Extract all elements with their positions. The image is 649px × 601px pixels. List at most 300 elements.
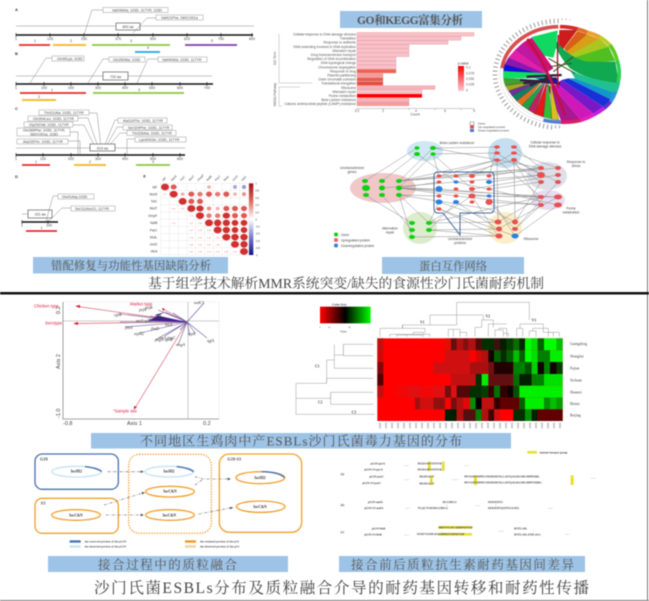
panel: gene mutation maps D: 1 (21, 224, 23, 228)
cluster backgrounds (350, 138, 567, 244)
uncharacterized proteins callout (434, 172, 494, 235)
chart: protein correlation matrix E: NalB (150, 221, 158, 225)
box: S3: S3 (41, 500, 46, 505)
chart: biplot: sopB (155, 316, 164, 321)
chart: protein correlation matrix E: 0.67 (189, 252, 193, 254)
bar chart: GO and KEGG enrichment: Response to antibiotic (324, 41, 356, 45)
chart: biplot: msgA (176, 342, 185, 347)
chart: protein correlation matrix E: MutL (150, 235, 157, 239)
plasmid legend: the reserved portion of the pG19 (85, 540, 127, 544)
plasmid legend: the deserted portion of the pG19 (85, 545, 127, 549)
panel: gene mutation maps C: 619 aa (97, 146, 108, 150)
panel: gene mutation maps B: 400 (122, 86, 128, 90)
panel: gene mutation maps C: Ala316Thr; 103D, 117YR (123, 119, 163, 123)
chart: protein correlation matrix E: 0.71 (163, 194, 167, 196)
match marks (428, 466, 572, 533)
chart: virulence gene heatmap (296, 302, 587, 428)
chart: protein correlation matrix E: MutT (188, 174, 195, 182)
match marks: : (442, 466, 443, 469)
chart: protein correlation matrix E: 0.66 (189, 244, 194, 246)
diagram: resistance gene sequence alignment: pG19-parC (369, 475, 384, 479)
bar chart: GO and KEGG enrichment: Beta-Lactam resistance (321, 98, 356, 102)
chart: protein correlation matrix E: UvrD (150, 243, 158, 247)
match marks: :: (495, 504, 497, 507)
chart: biplot: fimA (125, 325, 133, 330)
panel: gene mutation maps A: 3 (130, 39, 132, 43)
chart: protein correlation matrix E: 0.61 (172, 209, 176, 211)
chart: protein correlation matrix E: 0.51 (189, 223, 193, 225)
row labels: Shanghai (570, 355, 584, 359)
chart: biplot: pefA (138, 307, 147, 312)
chart: protein correlation matrix E: 0.6 (255, 196, 260, 200)
downregulated protein nodes (436, 180, 518, 238)
box: intermediate: IncC&N (163, 513, 176, 517)
bar chart: GO and KEGG enrichment: Drug transmembrane transport (311, 53, 356, 57)
network labels: Uncharacterized (448, 237, 472, 241)
diagram: resistance gene sequence alignment: PEVAIIVMPPLVIEDEDENLLAITQAGKGMLMPPEIRL (464, 475, 540, 479)
color key: Value (340, 330, 347, 334)
diagram: resistance gene sequence alignment: MRTSVLPCARRPAFTAF (438, 525, 473, 529)
chart: protein correlation matrix E: NalB (205, 175, 213, 182)
box: G19: IncHI2 (71, 470, 82, 474)
heading: GO and KEGG enrichment: GO和KEGG富集分析 (357, 13, 464, 27)
title: lower section: 沙门氏菌ESBLs分布及质粒融合介导的耐药基因转移和耐药性传播 (94, 578, 589, 597)
panel: gene mutation maps B: 700 (204, 86, 210, 90)
diagram: resistance gene sequence alignment: AEKKDTQATEGAAEL (488, 506, 519, 510)
diagram: resistance gene sequence alignment (341, 450, 596, 537)
color key: Color Key (332, 302, 347, 306)
row labels: Beijing (570, 414, 581, 418)
panel: gene mutation maps A: 4 (147, 46, 149, 50)
box: S3: IncC&N (69, 513, 83, 517)
bar chart: GO and KEGG enrichment: Ribosome (341, 86, 356, 90)
bar chart: GO and KEGG enrichment: DNA topological change (321, 61, 356, 65)
plasmid legend: the retained portion of the pS3 (200, 540, 239, 544)
cluster labels: C2 (318, 401, 323, 405)
heatmap cells (377, 338, 563, 421)
panel: gene mutation maps C: 1 (15, 157, 17, 161)
column labels (380, 423, 560, 428)
chart: biplot: sopE (188, 331, 197, 336)
row labels: Shaanxi (570, 390, 582, 394)
diagram: resistance gene sequence alignment: (a) (341, 472, 344, 476)
row labels: Guangdong (570, 342, 587, 346)
chart: protein correlation matrix E: -1 (255, 253, 258, 257)
chart: protein correlation matrix E: E (143, 174, 146, 178)
match marks: :: (446, 504, 448, 507)
heading: virulence gene distribution: 不同地区生鸡肉中产ESBLs沙门氏菌毒力基因的分布 (140, 434, 462, 448)
network labels: DNA damage stimulus (529, 144, 562, 148)
bar chart: GO and KEGG enrichment: 2 (382, 109, 384, 113)
panel: gene mutation maps D: 100 (46, 224, 52, 228)
network labels: Purine (566, 206, 576, 210)
panel: gene mutation maps A: 1 (15, 37, 17, 41)
panel: gene mutation maps C: Thr326Ala; 103D, 117YR (132, 132, 172, 136)
chart: protein correlation matrix E: ParC (214, 174, 222, 182)
diagram: resistance gene sequence alignment: HGDSACY (419, 475, 435, 479)
heading: protein interaction network: 蛋白互作网络 (419, 260, 487, 273)
chart: protein correlation matrix E: 0.65 (198, 244, 203, 246)
panel: gene mutation maps B: 2 (38, 95, 40, 99)
color key: 0 (319, 326, 321, 329)
chart: protein correlation matrix E: 0.58 (198, 230, 203, 232)
network labels: Response to (567, 160, 585, 164)
panel: gene mutation maps D: 151 aa (34, 212, 46, 216)
panel: gene mutation maps B: 720 aa (110, 75, 121, 79)
chart: protein correlation matrix E: MF (153, 185, 157, 189)
chart: protein correlation matrix E: ParC (150, 228, 158, 232)
diagram: resistance gene sequence alignment: IFITLAILANILALL (514, 532, 541, 536)
network labels: metabolism (563, 210, 580, 214)
diagram: resistance gene sequence alignment: HGDSAVYDTIVR (418, 461, 443, 465)
panel: gene mutation maps C: 500 (150, 157, 156, 161)
plasmid legend (70, 540, 240, 549)
chart: protein correlation matrix E: 0.82 (198, 237, 202, 239)
title: upper section: 基于组学技术解析MMR系统突变/缺失的食源性沙门氏菌耐药机制 (148, 275, 544, 291)
transfer arrows (104, 472, 232, 515)
panel: gene mutation maps C: Gln289Phe; 103D, 117YR, (23, 128, 65, 132)
chart: protein correlation matrix E: 0.81 (207, 244, 211, 246)
panel: gene mutation maps A (15, 7, 255, 52)
diagram: resistance gene sequence alignment: HGDSAVYDTIVR (418, 467, 443, 471)
dendrograms (380, 302, 559, 337)
chart: protein correlation matrix E: 0.85 (207, 230, 212, 232)
network legend: Downregulated protein (341, 244, 374, 248)
panel: gene mutation maps A: 500 (150, 37, 156, 41)
diagram: resistance gene sequence alignment: ATAFVIAMLRAARPKETAPAFTAF (417, 532, 465, 536)
section divider (0, 292, 649, 294)
match marks: : (430, 479, 431, 482)
chart: chord diagram (495, 20, 630, 132)
chart: protein correlation matrix E: 0.88 (224, 252, 229, 254)
box: G19-S3: IncHI2 (254, 476, 266, 480)
panel: gene mutation maps B: 100 (41, 86, 47, 90)
panel: gene mutation maps A: 2 (70, 39, 72, 43)
diagram: resistance gene sequence alignment: pG19-floR (372, 527, 386, 531)
box: G19-S3: G19-S3 (227, 456, 242, 461)
chart: biplot: cglB (114, 312, 122, 317)
chart: protein correlation matrix E: -0.2 (255, 225, 260, 229)
chart: protein correlation matrix E: HtrA (240, 175, 247, 182)
bar chart: GO and KEGG enrichment: Purine metabolism (329, 94, 356, 98)
panel: gene mutation maps A: 625 (184, 37, 190, 41)
panel: gene mutation maps B: 200 (68, 86, 74, 90)
panel: gene mutation maps B (15, 51, 213, 100)
panel: gene mutation maps C: 300 (95, 157, 101, 161)
panel: gene mutation maps C: 2 (89, 160, 91, 164)
chart: protein correlation matrix E: -0.4 (255, 232, 260, 236)
box: G19-S3 (219, 454, 302, 532)
chart: protein correlation matrix E: 0.81 (216, 237, 220, 239)
chart: biplot: sgfA (207, 338, 215, 343)
panel: gene mutation maps A: 1 (34, 39, 36, 43)
legend: chord diagram: Gene (478, 122, 486, 126)
panel: gene mutation maps D: D (15, 174, 18, 179)
panel: gene mutation maps D: 1 (40, 226, 42, 230)
row labels: Sichuan (570, 378, 582, 382)
chart: protein correlation matrix E: UvrD (231, 174, 239, 182)
red factor labels: Market type (130, 302, 153, 306)
chart: protein correlation matrix E: OmpF (196, 173, 205, 182)
panel: gene mutation maps B: 3 (138, 88, 140, 92)
bar chart: GO and KEGG enrichment: Mismatch repair (333, 49, 357, 53)
panel: gene mutation maps C: Lys400Gln; 103D, 117YR (139, 138, 180, 142)
panel: gene mutation maps C: 600 (177, 157, 183, 161)
match marks: : (442, 530, 443, 533)
panel: gene mutation maps A: 5 (211, 39, 213, 43)
chart: protein correlation matrix E: 0.87 (233, 252, 237, 254)
chart: protein correlation matrix E: MutL (223, 174, 230, 182)
panel: gene mutation maps A: 800 aa (122, 25, 134, 29)
panel: gene mutation maps B: Val440Ala; 103D, 117YR (162, 58, 202, 62)
lower left fans (502, 78, 559, 120)
legend: chord diagram (470, 122, 510, 132)
panel: gene mutation maps C: 1 (35, 160, 37, 164)
plasmid legend: the deserted portion of the pS3 (200, 545, 240, 549)
network labels: genes (348, 170, 357, 174)
green gene nodes (362, 146, 436, 239)
bar chart: GO and KEGG enrichment: 6 (444, 109, 446, 113)
cluster labels: C3 (352, 411, 356, 415)
panel: gene mutation maps B: Gln260Ala; 103D (113, 58, 141, 62)
chart: protein correlation matrix E: 0.4 (255, 203, 260, 207)
box: intermediate (129, 454, 211, 533)
network labels: Ribosome (524, 237, 539, 241)
chart: protein correlation matrix E: 0.86 (216, 244, 220, 246)
cluster labels: V3 (532, 319, 536, 323)
chart: protein correlation matrix E: 0.78 (216, 252, 220, 254)
bar chart: GO and KEGG enrichment: p.value (458, 62, 469, 66)
chart: biplot: sseA spiC (136, 318, 152, 323)
chart: protein correlation matrix E: MutT (150, 207, 157, 211)
bar chart: GO and KEGG enrichment: KEGG Pathway (273, 83, 277, 106)
chart: protein correlation matrix E: OmpF (148, 214, 157, 218)
box: intermediate: IncC&N (163, 490, 177, 494)
chart: protein correlation matrix E: TolC (179, 174, 187, 182)
diagram: resistance gene sequence alignment: (b) (341, 503, 344, 507)
panel: gene mutation maps A: Val421Phe; S8XC001a (161, 16, 198, 20)
color key: 60 (348, 326, 351, 329)
bar chart: GO and KEGG enrichment: 9 (473, 109, 475, 113)
network labels: stress (572, 164, 581, 168)
chart: biplot: pefB (144, 305, 153, 310)
match marks: : (428, 466, 429, 469)
bar chart: GO and KEGG enrichment: Count (410, 112, 420, 116)
network labels: Cellular response to (530, 140, 560, 144)
color key (319, 302, 371, 334)
chart: biplot: ssrA pagC (159, 335, 176, 340)
network legend: Gene (341, 233, 349, 237)
panel: gene mutation maps A: 250 (81, 37, 87, 41)
chart: biplot: pagN spvB (154, 337, 173, 342)
bar chart: GO and KEGG enrichment: Response to drug (330, 69, 356, 73)
bar chart: GO and KEGG enrichment: 0.025 (466, 82, 474, 86)
outer ring (502, 27, 619, 122)
legend: chord diagram: Up-regulated protein (478, 125, 506, 129)
network legend (334, 232, 374, 248)
panel: gene mutation maps D: Glu91Asp;103D (62, 195, 88, 199)
chart: protein correlation matrix E: 0.87 (207, 237, 211, 239)
bar chart: GO and KEGG enrichment: Plasmid partitioning (327, 74, 356, 78)
bar chart: GO and KEGG enrichment: 4 (415, 109, 417, 113)
diagram: resistance gene sequence alignment: pG19-S3-parC (362, 481, 381, 485)
panel: gene mutation maps B: 300 (95, 86, 101, 90)
diagram: resistance gene sequence alignment: DLGIRLG (443, 500, 457, 504)
panel: gene mutation maps C: S8XC001a, 103D (30, 132, 58, 136)
panel: gene mutation maps C: C (15, 106, 18, 111)
chart: protein correlation matrix E: MutS (170, 174, 178, 182)
diagram: resistance gene sequence alignment: HGDSACY (419, 481, 435, 485)
chart: protein correlation matrix E: 0 (255, 217, 257, 221)
panel: gene mutation maps C (15, 106, 186, 165)
chart: biplot: sifA (155, 313, 162, 318)
bar chart: GO and KEGG enrichment: 0.050 (466, 77, 474, 81)
panel: gene mutation maps C: 200 (68, 157, 74, 161)
panel: gene mutation maps C: Ser324Phe; 103D, 117YR (128, 126, 170, 130)
upper right fans (547, 30, 619, 122)
panel: gene mutation maps B: Gln90Lys; 103D (57, 57, 83, 61)
diagram: resistance gene sequence alignment: pG19-S3-floR (364, 533, 383, 537)
red factor arrows (76, 306, 187, 408)
panel: gene mutation maps C: 3 (152, 160, 154, 164)
panel: gene mutation maps C: 400 (122, 157, 128, 161)
red factor labels: "Sample site (113, 408, 138, 414)
bar chart: GO and KEGG enrichment: 0 (466, 88, 468, 92)
network labels: repair (386, 230, 395, 234)
chart: protein correlation matrix E: 0.2 (255, 210, 260, 214)
axes text (56, 306, 211, 427)
cluster labels (315, 315, 536, 415)
chart: biplot: sspH2 (134, 331, 144, 336)
heading: resistance gene differences: 接合前后质粒抗生素耐药基因间差异 (351, 557, 574, 572)
bar chart: GO and KEGG enrichment: Cellular response to DNA damage stimulus (293, 32, 356, 36)
box: S3 (35, 498, 118, 533)
chart: biplot: invA (165, 322, 173, 327)
panel: gene mutation maps C: Gly292Val; 103D, 117YR (29, 123, 69, 127)
panel: gene mutation maps B: 1 (51, 88, 53, 92)
match marks: : (533, 530, 534, 533)
diagram: resistance gene sequence alignment: IFITLAIL (514, 526, 527, 530)
diagram: resistance gene sequence alignment: mutant hotspot group (540, 450, 568, 454)
box: intermediate: IncHI2 (163, 470, 175, 474)
chart: protein correlation matrix E: 0.74 (207, 252, 212, 254)
decorative label ticks (495, 21, 624, 128)
match marks: : (571, 479, 572, 482)
panel: gene mutation maps B: 1 (15, 86, 17, 90)
chart: protein correlation matrix E: -0.6 (255, 239, 260, 243)
diagram: plasmid fusion during conjugation (35, 454, 302, 549)
axes text: 0.2 (56, 306, 62, 314)
bar chart: GO and KEGG enrichment: Translation (340, 37, 356, 41)
chart: biplot (34, 300, 219, 427)
network labels: Uncharacterized (340, 166, 364, 170)
box: G19 (35, 454, 118, 489)
panel: gene mutation maps A: 375 (115, 37, 121, 41)
chart: protein correlation matrix E: 0.8 (255, 189, 260, 193)
panel: gene mutation maps B: B (15, 51, 18, 56)
cluster labels: V2 (486, 315, 490, 319)
bar chart: GO and KEGG enrichment: 0.0 (355, 109, 359, 113)
panel: gene mutation maps A: 800 (249, 37, 255, 41)
chart: protein correlation matrix E: -0.8 (255, 246, 260, 250)
diagram: resistance gene sequence alignment: TLQCTGKIDLGIRLG (418, 506, 449, 510)
panel: gene mutation maps C: Gln304Leu; 103D, 117YR (33, 117, 74, 121)
axes text: Axis 2 (56, 354, 62, 369)
network labels: Alternation (382, 226, 398, 230)
chart: biplot: sodC1 (194, 300, 204, 305)
panel: gene mutation maps B: 600 (177, 86, 183, 90)
red factor labels: Chicken type (34, 304, 59, 308)
bar chart: GO and KEGG enrichment: DNA unwinding involved in DNA replication (293, 45, 356, 49)
bar chart: GO and KEGG enrichment: Translational elongation (321, 82, 356, 86)
panel: gene mutation maps C: Thr311Ala; 103D, 117YR (44, 111, 84, 115)
panel: gene mutation maps C: Ala235Thr; 103D, 117YR (23, 140, 63, 144)
bar chart: GO and KEGG enrichment: GO Term (273, 51, 277, 65)
heading: plasmid fusion (48, 556, 288, 572)
panel: gene mutation maps D: Ser111Asn21; 117YR (75, 207, 109, 211)
chart: protein correlation matrix E: 1 (255, 182, 257, 186)
panel: gene mutation maps A: 750 (218, 37, 224, 41)
bar chart: GO and KEGG enrichment: Outer chromatid cohesion (318, 78, 356, 82)
chart: protein correlation matrix E: TolC (151, 200, 158, 204)
network labels: proteins (454, 241, 466, 245)
legend: chord diagram: Down-regulated protein (478, 128, 510, 132)
heading: GO and KEGG enrichment (340, 11, 482, 28)
cluster labels: V1 (420, 321, 425, 325)
purple gene arrows (120, 303, 207, 345)
chart: protein correlation matrix E: 0.51 (189, 230, 193, 232)
chart: protein correlation matrix E: 0.78 (198, 252, 203, 254)
bar chart: GO and KEGG enrichment: 0.075 (466, 72, 474, 76)
diagram: resistance gene sequence alignment: PEVSIIVMPPLVIEDEDENLLAITQAGKGMLMPPTDIRL (464, 481, 542, 485)
row labels: Henan (570, 402, 580, 406)
heading: protein interaction network (382, 257, 524, 274)
cluster labels: C1 (315, 364, 320, 368)
heading: mismatch repair analysis: 错配修复与功能性基因缺陷分析 (51, 258, 211, 272)
diagram: resistance gene sequence alignment: AEKKDTG (488, 500, 504, 504)
panel: gene mutation maps A: A (15, 7, 18, 12)
chart: protein correlation matrix E: HtrA (151, 250, 158, 254)
heading: mismatch repair analysis (33, 257, 228, 274)
bar chart: GO and KEGG enrichment: Chromosome segregation (318, 65, 356, 69)
network legend: Upregulated protein (341, 238, 370, 242)
chart: protein correlation matrix E: MF (161, 176, 167, 182)
axes text: -1.0 (56, 409, 62, 418)
central dark mix and crossing bands (520, 35, 575, 115)
bar chart: GO and KEGG enrichment: 0.1 (466, 66, 471, 70)
red factor labels: Serotype (45, 320, 63, 326)
axes text: -0.8 (63, 421, 72, 427)
chart: biplot: fimD (151, 326, 159, 331)
panel: gene mutation maps A: 125 (47, 37, 53, 41)
box: G19-S3: IncC&N (253, 505, 267, 509)
diagram: resistance gene sequence alignment: pG19-S3-gyrA (364, 468, 384, 472)
chart: protein correlation matrix E: 0.66 (198, 223, 203, 225)
network labels (340, 140, 585, 245)
row labels: Fujian (570, 366, 580, 370)
panel: gene mutation maps C: 100 (40, 157, 46, 161)
red factor labels (34, 302, 153, 414)
diagram: resistance gene sequence alignment: pG19-aadA (368, 500, 384, 504)
axes text: 0.2 (203, 421, 211, 427)
axes text: Axis 1 (127, 421, 142, 427)
chart: protein correlation matrix E: 0.62 (181, 209, 185, 211)
diagram: resistance gene sequence alignment: pG19-gyrA (371, 461, 386, 465)
highlights (428, 451, 574, 536)
panel: gene mutation maps A: Val246Ala; 103D, 117YR, 103D (112, 8, 162, 12)
match marks: : (474, 479, 475, 482)
bar chart: GO and KEGG enrichment: Mismatch repair (333, 90, 357, 94)
